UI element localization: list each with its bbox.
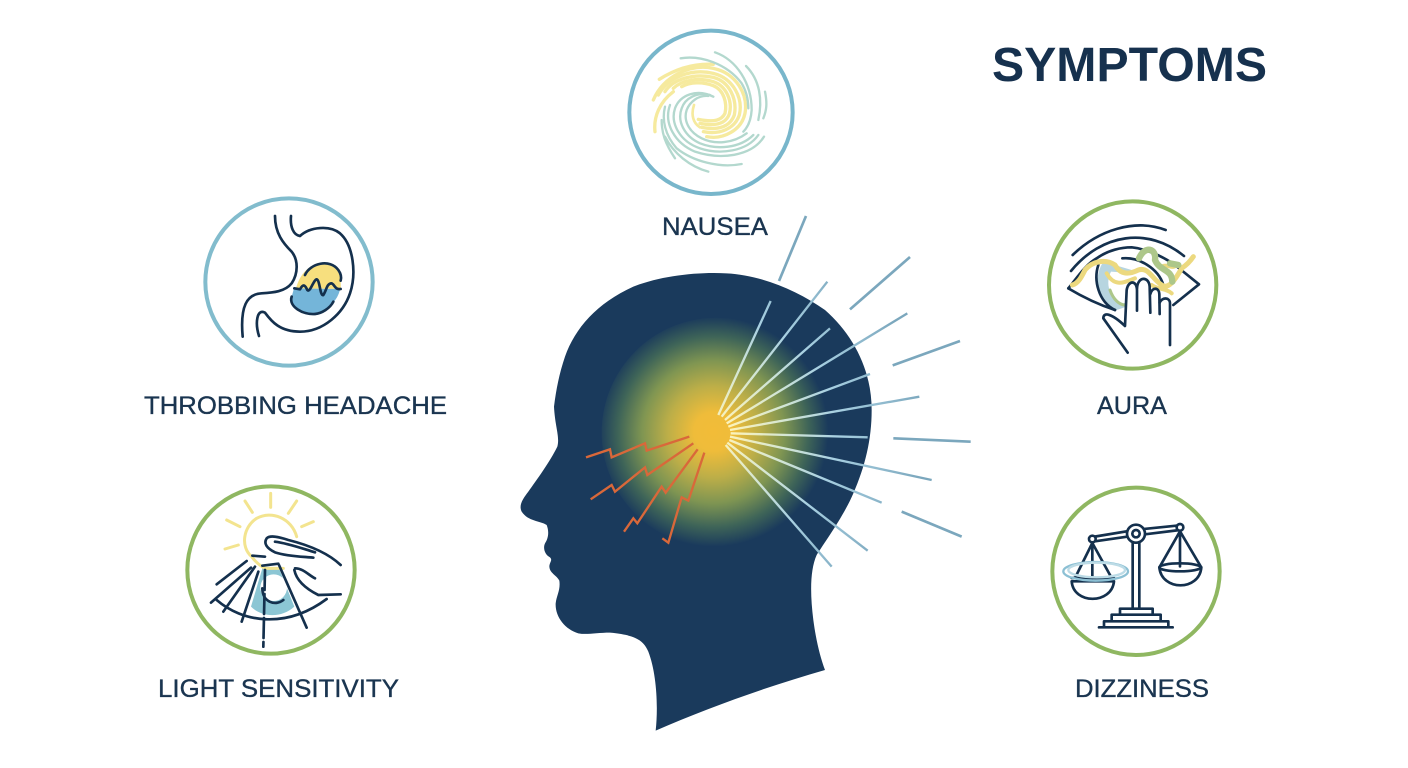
panel: throbbing headache xyxy=(144,198,447,420)
lightning bolts xyxy=(586,437,704,543)
icon: sun, hand and eye xyxy=(187,486,355,654)
icon: stomach xyxy=(205,198,373,366)
label: light sensitivity: LIGHT SENSITIVITY xyxy=(158,675,399,703)
panel: aura xyxy=(1049,201,1216,420)
pain glow xyxy=(602,318,832,548)
panel: light sensitivity xyxy=(158,486,399,703)
panel: nausea xyxy=(629,31,793,241)
label: aura: AURA xyxy=(1097,392,1167,420)
icon: balance scale xyxy=(1052,488,1220,655)
radiating rays xyxy=(718,282,932,567)
panel: dizziness xyxy=(1052,488,1220,703)
icon: nausea spiral xyxy=(629,31,793,194)
icon: eye with aura and hand xyxy=(1049,201,1216,369)
label: dizziness: DIZZINESS xyxy=(1075,675,1209,703)
title: SYMPTOMS xyxy=(992,39,1267,92)
label: nausea: NAUSEA xyxy=(662,213,768,241)
head silhouette xyxy=(521,273,872,731)
outer rays xyxy=(779,216,971,537)
label: throbbing headache: THROBBING HEADACHE xyxy=(144,392,447,420)
central figure: head silhouette with pain burst xyxy=(521,216,971,731)
